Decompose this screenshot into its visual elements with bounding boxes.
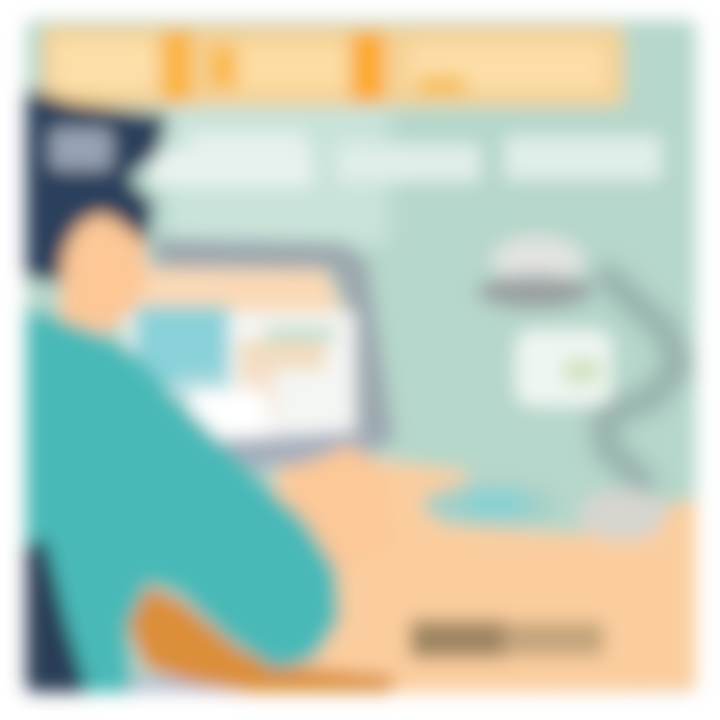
dark trousers bbox=[20, 540, 90, 700]
face bbox=[60, 214, 148, 333]
shirt bbox=[20, 306, 340, 700]
lower background fill bbox=[132, 672, 216, 696]
hair bbox=[20, 86, 168, 282]
hand bbox=[308, 436, 371, 476]
laptop bbox=[125, 238, 395, 472]
panel: lighter wall area bbox=[165, 105, 390, 245]
subtitle text block bbox=[150, 132, 661, 186]
teal mat on desk bbox=[422, 483, 558, 527]
desk surface bbox=[250, 450, 700, 695]
title banner bbox=[42, 26, 624, 106]
footer text block bbox=[410, 620, 604, 658]
icon: desk lamp bbox=[477, 236, 680, 541]
chair accent bbox=[128, 586, 395, 692]
